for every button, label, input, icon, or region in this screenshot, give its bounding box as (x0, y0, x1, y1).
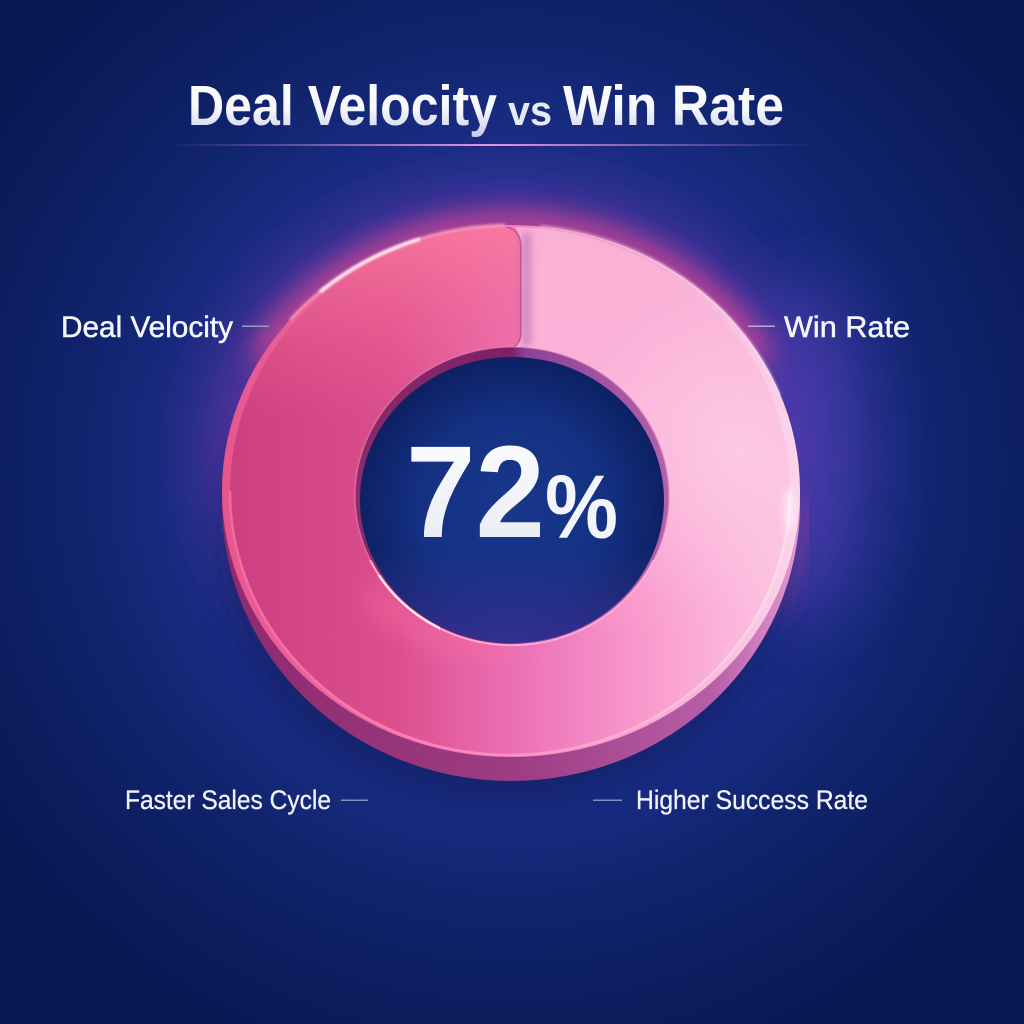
ring side wall (222, 225, 800, 781)
lower rim highlight (230, 491, 790, 755)
center hole (355, 357, 669, 645)
inner wall (355, 347, 669, 645)
top left rim highlight (290, 225, 505, 320)
center value (406, 418, 618, 565)
right rim bright spot (784, 488, 794, 532)
center value: % (545, 458, 618, 558)
donut chart (211, 200, 870, 803)
segment: win rate (515, 227, 790, 498)
title: Win Rate (563, 74, 784, 138)
title: vs (508, 87, 552, 134)
inner lower edge highlight (369, 560, 654, 646)
seam shade (522, 232, 531, 346)
center value: 72 (406, 418, 545, 565)
inner lower left bright edge (377, 575, 440, 630)
seam edge (506, 227, 521, 349)
label: win rate: Win Rate (784, 311, 910, 344)
label: faster sales cycle: Faster Sales Cycle (125, 785, 331, 815)
inner bright glow (373, 592, 474, 648)
ring outer bevel (222, 225, 800, 757)
glow behind ring (211, 200, 870, 803)
upper right rim highlight (540, 226, 780, 395)
ring top surface (230, 227, 790, 754)
win rate highlight (640, 341, 790, 556)
segment: deal velocity (264, 227, 520, 366)
title (188, 74, 784, 138)
label: higher success rate: Higher Success Rate (636, 785, 868, 815)
label: deal velocity: Deal Velocity (61, 311, 233, 344)
bright rim highlight (320, 239, 420, 292)
title: Deal Velocity (188, 74, 497, 138)
